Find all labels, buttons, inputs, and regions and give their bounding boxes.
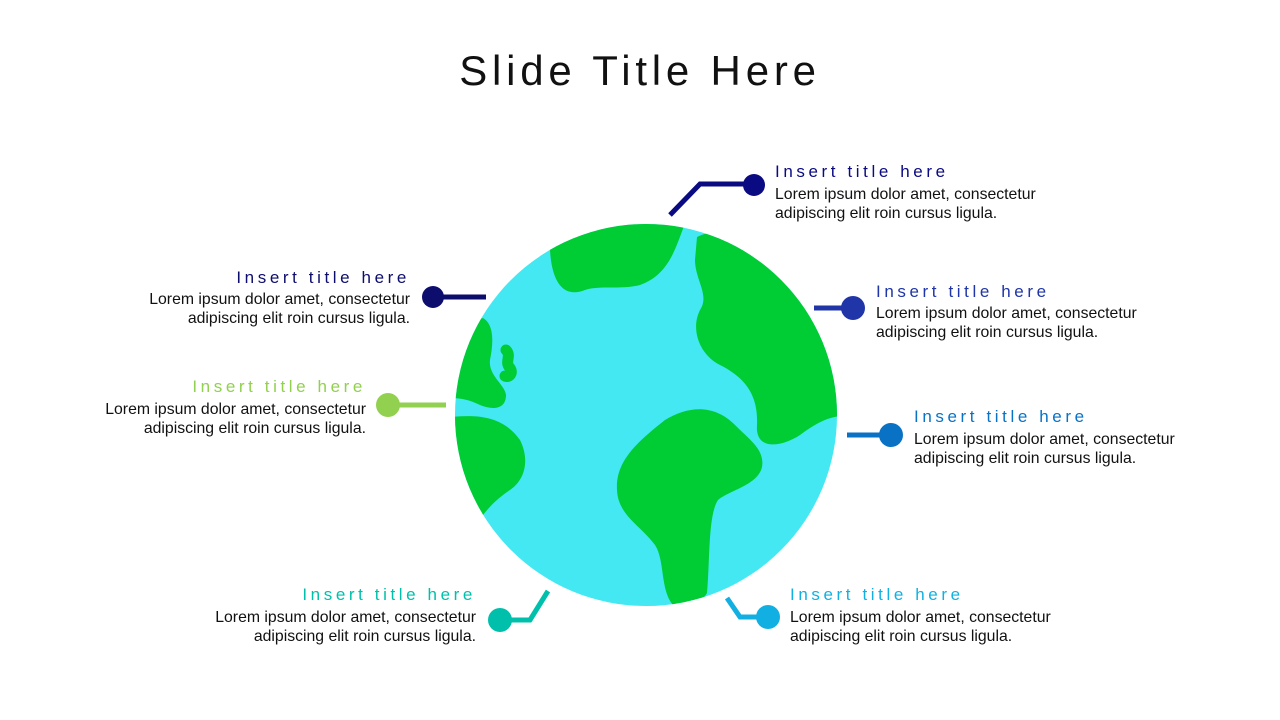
- text: bottom left: Lorem ipsum dolor amet, consectetur: [215, 609, 476, 626]
- text: right top: [876, 282, 1137, 341]
- text: top: Lorem ipsum dolor amet, consectetur: [775, 186, 1036, 203]
- text: right blue: adipiscing elit roin cursus ligula.: [914, 450, 1136, 467]
- text: bottom right: Lorem ipsum dolor amet, consectetur: [790, 609, 1051, 626]
- connector: right blue: [847, 423, 903, 447]
- text: right blue: Lorem ipsum dolor amet, consectetur: [914, 431, 1175, 448]
- continent: south america: [617, 409, 762, 606]
- text: right blue: Insert title here: [914, 407, 1088, 426]
- connector: bottom left: [488, 591, 548, 632]
- text: top: adipiscing elit roin cursus ligula.: [775, 205, 997, 222]
- connector: left green: [376, 393, 446, 417]
- text: left top: [149, 268, 410, 327]
- continent: west upper: [456, 318, 506, 408]
- text: bottom left: Insert title here: [302, 585, 476, 604]
- text: bottom right: Insert title here: [790, 585, 964, 604]
- text: bottom left: adipiscing elit roin cursus ligula.: [254, 628, 476, 645]
- text: left green: adipiscing elit roin cursus ligula.: [144, 420, 366, 437]
- text: bottom right: adipiscing elit roin cursus ligula.: [790, 628, 1012, 645]
- text: right top: Lorem ipsum dolor amet, consectetur: [876, 305, 1137, 322]
- title: Slide Title Here: [459, 47, 821, 94]
- text: left top: Lorem ipsum dolor amet, consectetur: [149, 291, 410, 308]
- continent: east: [695, 234, 837, 444]
- connector: bottom right: [727, 598, 780, 629]
- continent: north: [550, 224, 684, 292]
- text: right blue: [914, 407, 1175, 467]
- text: right top: Insert title here: [876, 282, 1050, 301]
- text: bottom right: [790, 585, 1051, 645]
- text: top: [775, 162, 1036, 222]
- text: right top: adipiscing elit roin cursus ligula.: [876, 324, 1098, 341]
- text: left green: Lorem ipsum dolor amet, consectetur: [105, 401, 366, 418]
- island: [505, 350, 511, 377]
- connector: right top: [814, 296, 865, 320]
- text: left top: adipiscing elit roin cursus ligula.: [188, 310, 410, 327]
- connector: left top: [422, 286, 486, 308]
- continent: west lower: [455, 416, 526, 515]
- text: left top: Insert title here: [236, 268, 410, 287]
- text: left green: [105, 377, 366, 437]
- text: bottom left: [215, 585, 476, 645]
- globe: [455, 224, 837, 606]
- text: left green: Insert title here: [192, 377, 366, 396]
- connector: top: [670, 174, 765, 215]
- text: top: Insert title here: [775, 162, 949, 181]
